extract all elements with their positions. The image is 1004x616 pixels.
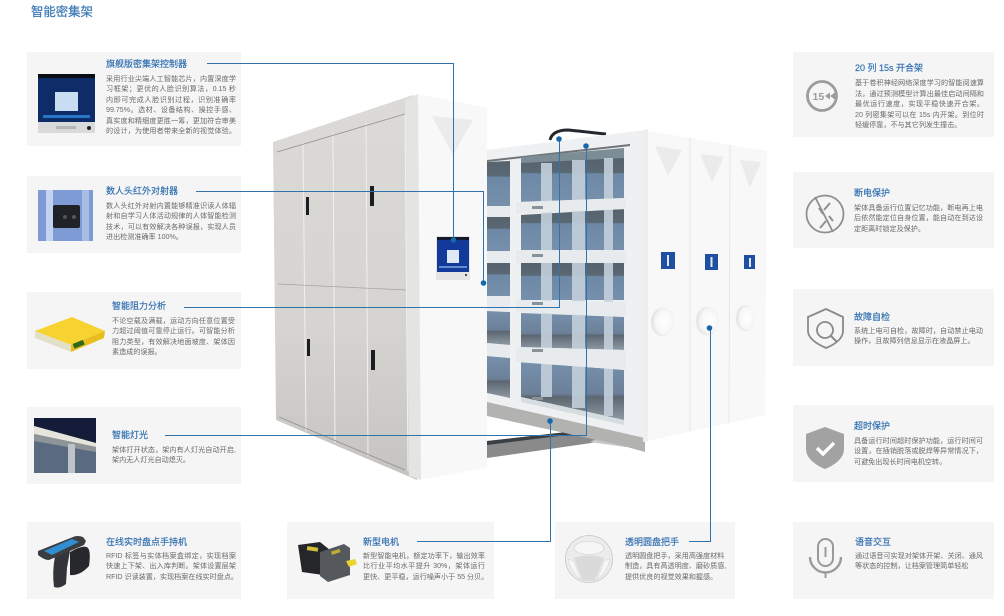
connector: lighting	[165, 146, 586, 436]
text block: RFID 识读装置，实现档案在线实时盘点。	[106, 573, 238, 581]
text block	[106, 552, 238, 581]
text block: 习框架；更优的人脸识别算法，0.15 秒	[106, 85, 236, 93]
text block: 法，通过预测模型计算出最佳启动间隔和	[855, 90, 984, 98]
text block: 阻力类型，有效解决地面坡度、架体因	[112, 338, 235, 346]
icon: infrared sensor photo	[38, 190, 93, 241]
door handles	[306, 186, 375, 370]
text block: 定距离时锁定及保护。	[854, 225, 925, 233]
icon: motor	[298, 542, 357, 582]
heading: 透明圆盘把手	[625, 537, 679, 547]
triangle logos	[655, 146, 761, 188]
text block: 技术，可以有效解决各种误报，实现人员	[106, 223, 236, 231]
connector: handle	[689, 328, 710, 542]
heading: 语音交互	[855, 537, 891, 547]
text block	[112, 317, 235, 356]
dial handles	[651, 305, 754, 336]
heading: 新型电机	[363, 537, 399, 547]
icon: fast-forward 15	[806, 80, 838, 112]
text block: 系统上电可自检，故障时，自动禁止电动	[854, 327, 983, 335]
text block: 透明圆盘把手，采用高强度材料	[625, 552, 724, 560]
text block: 真实度和精细度更胜一筹，更加符合审美	[106, 116, 236, 124]
connector: infrared	[196, 192, 484, 283]
panel: smart lighting	[27, 407, 241, 484]
floor rails	[487, 431, 640, 458]
text block: RFID 标签与实体档案盒绑定，实现档案	[106, 552, 236, 560]
text block: 架体具备运行位置记忆功能，断电再上电	[854, 204, 983, 212]
front closed cabinet	[273, 94, 487, 480]
text block: 提供优良的视觉效果和握感。	[625, 573, 717, 581]
icon: yellow control board	[35, 317, 105, 352]
text block: 架内无人灯光自动熄灭。	[112, 456, 190, 464]
icon: power cut	[806, 194, 844, 234]
icon: shield with check	[806, 427, 844, 469]
heading: 智能阻力分析	[112, 301, 166, 311]
top band over right glass	[521, 148, 624, 165]
icon: steering disc	[565, 535, 613, 583]
panel: voice interaction	[793, 522, 994, 599]
text block: 通过语音可实现对架体开架、关闭、通风	[855, 552, 983, 560]
icon: RFID handheld scanner	[38, 536, 90, 588]
panel: disc handle	[555, 522, 735, 599]
text block: 最优运行速度，实现平稳快速开合架。	[855, 100, 984, 108]
text block	[112, 446, 236, 464]
heading: 旗舰版密集架控制器	[106, 59, 187, 69]
heading: 20 列 15s 开合架	[855, 63, 923, 73]
icon: microphone	[808, 538, 842, 578]
panel: timeout protection	[793, 405, 994, 482]
text block: 20 列密集架可以在 15s 内开架。到位时	[855, 110, 984, 118]
cable	[550, 130, 606, 140]
heading: 超时保护	[854, 421, 890, 431]
text block: 内即可完成人脸识别过程，识别准确率	[106, 96, 236, 104]
text block	[854, 437, 983, 466]
panel: flagship controller	[27, 52, 241, 146]
shelf tags	[532, 206, 543, 400]
text block	[854, 204, 983, 233]
text block: 等状态的控制，让档案管理简单轻松	[855, 562, 968, 570]
text block	[855, 79, 984, 129]
heading: 故障自检	[854, 312, 890, 322]
panel: new motor	[287, 522, 494, 599]
connector: resistance	[184, 139, 560, 308]
panel: power-off protection	[793, 172, 994, 248]
text block	[106, 74, 236, 135]
door seams	[303, 114, 408, 471]
connector: motor	[417, 421, 550, 542]
panel: fault self-check	[793, 289, 994, 366]
control screen	[436, 236, 470, 280]
end panel logo	[432, 116, 473, 155]
text block: 的设计，为使用者带来全新的视觉体验。	[106, 127, 236, 135]
icon: shield with magnifier	[807, 308, 844, 349]
title: 智能密集架	[31, 5, 93, 19]
shelf boards	[487, 198, 626, 370]
text block: 操作，且故障列信息显示在液晶屏上。	[854, 337, 975, 345]
text block: 比行业平均水平提升 30%，架体运行	[363, 562, 485, 570]
text block: 具备运行时间超时保护功能，运行时间可	[854, 437, 983, 445]
open shelving frame	[487, 130, 645, 452]
right glass rows	[521, 158, 624, 425]
text block: 力超过阈值可靠停止运行。可智能分析	[112, 327, 235, 335]
text block: 轻缓停靠，不与其它列发生撞击。	[855, 121, 961, 129]
connector: controller	[207, 64, 454, 240]
icon: fast-forward 15: 15	[812, 91, 824, 103]
text block: 可避免出现长时间电机空转。	[854, 458, 946, 466]
text block: 更快、更平稳，运行噪声小于 55 分贝。	[363, 573, 488, 581]
text block: 架体打开状态，架内有人灯光自动开启,	[112, 446, 236, 454]
text block: 射和自学习人体活动规律的人体智能检测	[106, 212, 236, 220]
panel: 20 columns in 15s	[793, 52, 994, 137]
heading: 数人头红外对射器	[106, 186, 178, 196]
text block: 制造，具有高透明度、磨砂质感,	[625, 562, 726, 570]
icon: lighting photo	[34, 418, 96, 473]
panel: infrared sensor	[27, 176, 241, 253]
panel: handheld terminal	[27, 522, 241, 599]
text block	[106, 202, 236, 241]
text block	[854, 327, 983, 345]
heading: 断电保护	[854, 188, 890, 198]
text block: 采用行业尖端人工智能芯片，内置深度学	[106, 74, 236, 82]
icon: control screen	[38, 74, 95, 133]
text block	[625, 552, 726, 581]
heading: 智能灯光	[112, 430, 148, 440]
text block: 不论空载及满载，运动方向任意位置受	[112, 317, 235, 325]
text block: 基于卷积神经网络深度学习的智能阅速算	[855, 79, 984, 87]
panel: resistance analysis	[27, 292, 241, 369]
text block: 快速上下架、出入库判断。架体设置层架	[106, 562, 236, 570]
heading: 在线实时盘点手持机	[106, 537, 187, 547]
text block	[363, 552, 488, 581]
text block	[855, 552, 983, 570]
text block: 后依然能定位自身位置，能自动在到达设	[854, 214, 983, 222]
text block: 进出检测准确率 100%。	[106, 233, 183, 241]
white end panels	[643, 129, 767, 442]
blue labels	[661, 252, 755, 270]
text block: 99.75%。选材、设备结构、操控手感、	[106, 106, 236, 114]
text block: 设置，在插销脱落或脱焊等异常情况下，	[854, 447, 983, 455]
text block: 素造成的误报。	[112, 348, 162, 356]
left glass column	[487, 161, 510, 398]
text block: 数人头红外对射内置能够精准识读人体辐	[106, 202, 236, 210]
shelf uprights	[541, 158, 613, 416]
text block: 新型智能电机，额定功率下，输出效率	[363, 552, 485, 560]
